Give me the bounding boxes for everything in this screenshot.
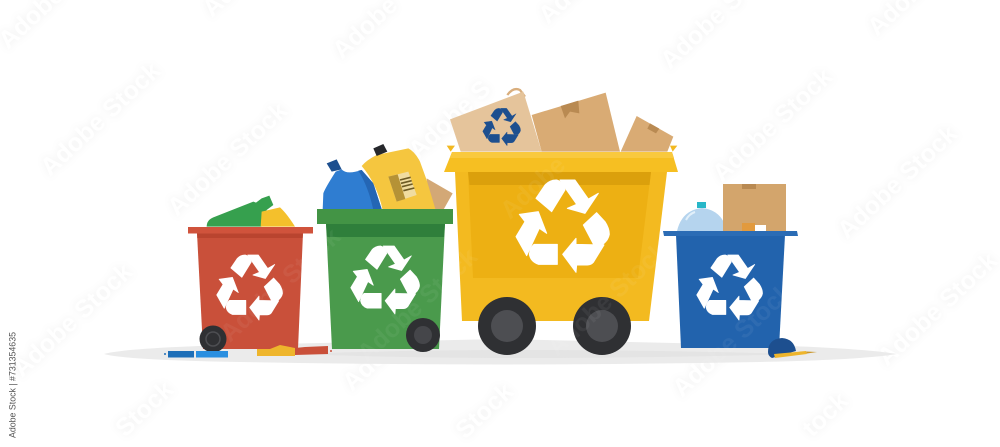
plastic bottle dome — [677, 202, 727, 231]
recycling symbol — [217, 255, 283, 320]
watermarks over bins: Adobe Stock — [215, 223, 346, 347]
watermarks: Stock — [450, 377, 519, 444]
recycling symbol — [697, 255, 763, 320]
blue bin contents — [677, 184, 786, 231]
litter: yellow and red scraps — [257, 345, 332, 356]
side stock label: Adobe Stock | #731354635 — [8, 332, 18, 438]
watermarks: Adobe S — [403, 75, 496, 164]
yellow bin — [444, 152, 678, 355]
blue bin — [663, 231, 798, 348]
watermarks: Adobe Stock — [872, 247, 1000, 371]
rim — [663, 231, 798, 236]
recycling symbol — [351, 246, 420, 314]
watermarks: Adobe Stock — [7, 258, 138, 382]
watermarks: Adobe — [337, 323, 413, 396]
ground shadow — [104, 339, 897, 364]
small box — [621, 116, 673, 152]
red bin — [188, 227, 313, 352]
rim — [188, 227, 313, 234]
large box — [532, 93, 620, 152]
watermarks: Adobe Stock — [707, 63, 838, 187]
green bin — [317, 209, 453, 352]
wheels — [478, 297, 631, 355]
watermarks: Adobe Stock — [162, 97, 293, 221]
yellow bin contents: cardboard boxes — [447, 89, 677, 152]
watermarks: tock — [797, 387, 854, 442]
green bin contents: jugs — [323, 144, 453, 210]
litter: blue pens — [164, 351, 228, 358]
red bin contents — [207, 196, 295, 227]
litter: blue cap and pencil — [768, 338, 817, 358]
watermarks over bins: Adobe Stock — [667, 278, 798, 402]
rim — [317, 209, 453, 224]
watermarks: Adobe Stock — [832, 120, 963, 244]
watermarks over bins — [215, 151, 798, 402]
watermarks: Stock — [110, 375, 179, 442]
watermarks over bins: Adobe — [495, 151, 571, 224]
wheel — [200, 326, 226, 352]
cardboard box — [723, 184, 786, 231]
watermarks over bins: Adobe Stock — [542, 237, 673, 361]
box with blue recycling mark — [450, 92, 542, 152]
blue jug — [323, 159, 382, 210]
watermarks: Adobe — [667, 329, 743, 402]
rim — [444, 152, 678, 172]
wheel — [406, 318, 440, 352]
recycling symbol — [516, 180, 609, 272]
yellow jug — [362, 144, 436, 210]
watermarks: Adobe Stock — [35, 57, 166, 181]
watermarks over bins: Adobe Stock — [352, 243, 483, 367]
